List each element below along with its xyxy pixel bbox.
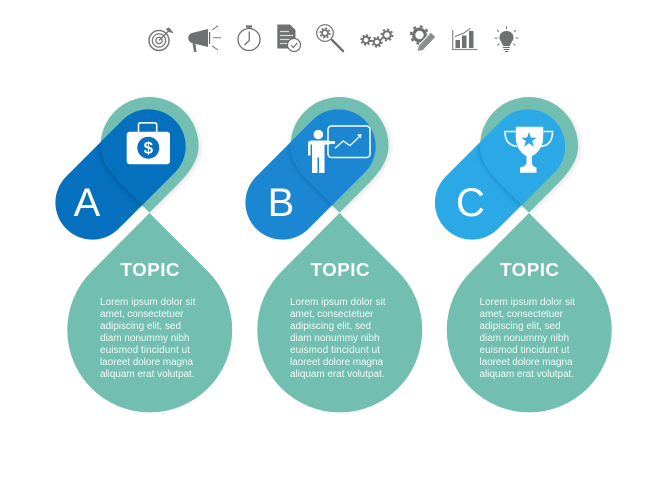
soft shadow of drop B — [292, 99, 390, 214]
icon: trophy — [505, 127, 552, 173]
text block B: Lorem ipsum dolor sit — [290, 297, 386, 308]
icon: stopwatch — [238, 26, 260, 50]
icon: presenter with chart — [308, 126, 370, 173]
heading B: TOPIC — [310, 259, 370, 280]
soft shadow of drop C — [482, 99, 580, 214]
icon: megaphone — [188, 26, 221, 52]
upper teal drop C — [480, 97, 578, 212]
text block A: diam nonummy nibh — [100, 333, 190, 344]
letter A: A — [74, 181, 101, 225]
text block B: euismod tincidunt ut — [290, 345, 380, 356]
letter C: C — [456, 181, 485, 225]
icon: magnifier with gear — [317, 25, 343, 51]
text block A: laoreet dolore magna — [100, 357, 193, 368]
upper teal drop A — [100, 97, 198, 212]
drop shadow on capsule B — [290, 146, 332, 205]
icon row — [149, 24, 518, 52]
blue capsule A — [55, 109, 186, 240]
text block A: adipiscing elit, sed — [100, 321, 181, 332]
text block C: aliquam erat volutpat. — [480, 369, 574, 380]
letter B: B — [268, 181, 294, 225]
text block B: adipiscing elit, sed — [290, 321, 371, 332]
text block C: euismod tincidunt ut — [480, 345, 570, 356]
icon: light bulb — [494, 26, 518, 52]
icon: money briefcase — [127, 123, 170, 164]
icon: bar chart — [453, 28, 478, 50]
icon: money briefcase: $ — [144, 139, 154, 158]
text block C: amet, consectetuer — [480, 309, 564, 320]
upper teal drop B — [290, 97, 388, 212]
lower teal drop C — [447, 213, 612, 412]
lower teal drop A — [67, 213, 232, 412]
text block C: Lorem ipsum dolor sit — [480, 297, 575, 308]
text block B: amet, consectetuer — [290, 309, 374, 320]
icon: document with check — [277, 24, 300, 52]
icon: three gears — [361, 29, 393, 47]
heading A: TOPIC — [120, 259, 180, 280]
blue capsule B — [245, 109, 376, 240]
icon: gear and pencil — [411, 26, 436, 52]
drop shadow on capsule A — [100, 146, 142, 205]
text block A: Lorem ipsum dolor sit — [100, 297, 196, 308]
text block B: diam nonummy nibh — [290, 333, 380, 344]
text block C: laoreet dolore magna — [480, 357, 573, 368]
text block A: amet, consectetuer — [100, 309, 184, 320]
soft shadow of drop A — [102, 99, 200, 214]
panel: C — [435, 97, 612, 412]
blue capsule C — [435, 109, 565, 240]
text block A: euismod tincidunt ut — [100, 345, 190, 356]
heading C: TOPIC — [500, 259, 559, 280]
text block B: laoreet dolore magna — [290, 357, 383, 368]
capsule overlap A — [100, 109, 186, 205]
panel: B — [245, 97, 422, 412]
lower teal drop B — [257, 213, 422, 412]
text block C: diam nonummy nibh — [480, 333, 569, 344]
panel: A — [55, 97, 232, 412]
text block A: aliquam erat volutpat. — [100, 369, 194, 380]
text block C: adipiscing elit, sed — [480, 321, 560, 332]
text block B: aliquam erat volutpat. — [290, 369, 384, 380]
capsule overlap B — [290, 109, 376, 205]
drop shadow on capsule C — [480, 146, 522, 205]
capsule overlap C — [480, 109, 565, 205]
icon: target — [149, 28, 172, 50]
